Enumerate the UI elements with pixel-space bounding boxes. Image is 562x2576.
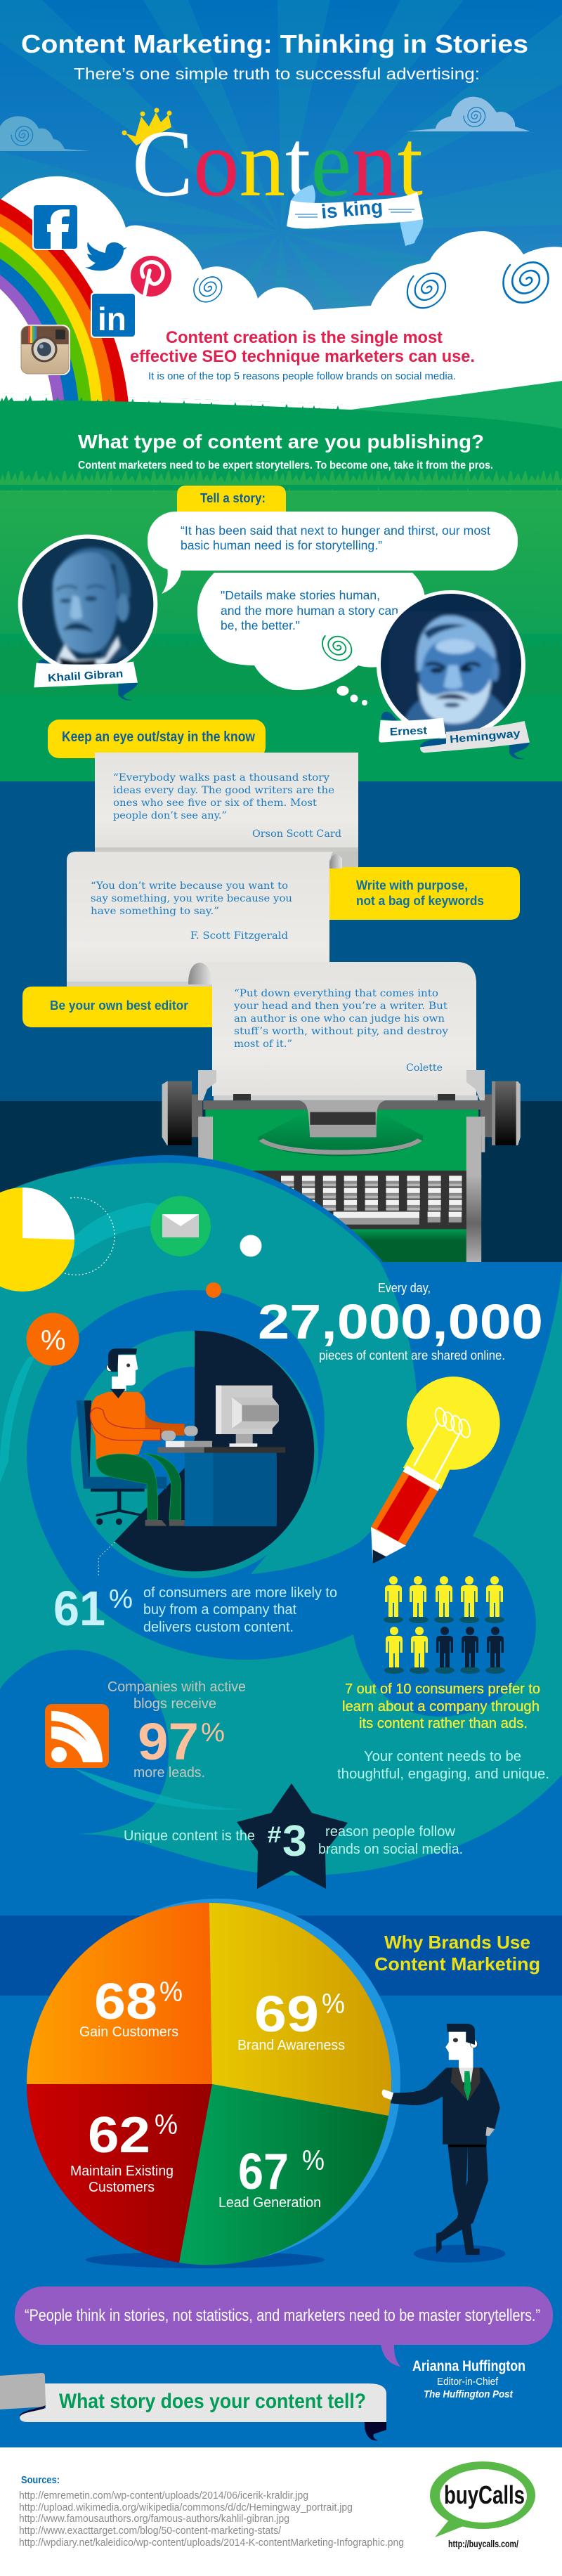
text: SEO statement: It is one of the top 5 reasons people follow brands on social media. (148, 370, 456, 382)
slice: brand awareness (209, 1903, 391, 2116)
speech bubble: Gibran quote (148, 512, 518, 594)
labels: 67 percent (218, 2144, 325, 2211)
stat: number 3 reason: 3 (282, 1817, 307, 1866)
labels: 62 percent: Customers (89, 2180, 155, 2195)
sky cloud right (405, 97, 530, 131)
trousers (96, 1454, 185, 1526)
infographic swirl background (0, 1155, 562, 2450)
sources list (19, 2474, 404, 2549)
illustration: businessman (382, 2024, 505, 2263)
tab: write with purpose: Write with purpose, (356, 878, 468, 892)
sources list: http://www.exacttarget.com/blog/50-content-marketing-stats/ (19, 2525, 282, 2537)
back arm and hand (145, 1412, 185, 1436)
ribbon: is king: is king (320, 195, 384, 223)
labels: 67 percent: 67 (238, 2144, 289, 2200)
stat: number 3 reason: # (267, 1822, 281, 1847)
slice: lead generation (179, 2084, 388, 2265)
attribution: Arianna Huffington: Editor-in-Chief (437, 2376, 499, 2388)
text: SEO statement (130, 328, 475, 382)
paper: Colette quote: “Put down everything that comes into (234, 988, 438, 999)
icon: RSS (45, 1704, 109, 1768)
typewriter paper bar and brackets (198, 1070, 485, 1100)
typewriter body (198, 1100, 485, 1263)
ribbon: Ernest Hemingway: Hemingway (450, 728, 521, 746)
attribution: Arianna Huffington: The Huffington Post (424, 2388, 514, 2400)
paper: Orson Scott Card quote: ones who see five or six of them. Most (113, 798, 318, 809)
footer background (0, 2447, 562, 2576)
stat: 97 percent: Companies with active (107, 1679, 246, 1695)
attribution: Arianna Huffington: Arianna Huffington (412, 2358, 525, 2374)
stat: 97 percent: % (201, 1718, 225, 1748)
thought bubble: Hemingway quote: be, the better." (221, 618, 300, 632)
typewriter knobs (162, 1081, 521, 1145)
band: darker blue (0, 1915, 562, 1996)
sources list: http://emremetin.com/wp-content/uploads/2014/06/icerik-kraldir.jpg (19, 2490, 308, 2502)
pie shadow (86, 2251, 325, 2268)
ribbon: what story does your content tell: What story does your content tell? (59, 2390, 366, 2413)
labels: 62 percent: % (155, 2109, 178, 2140)
labels: 62 percent: 62 (88, 2107, 150, 2164)
attribution: Arianna Huffington (412, 2358, 525, 2400)
icon: instagram (20, 325, 70, 375)
speech bubble: Gibran quote: basic human need is for storytelling.” (181, 538, 382, 552)
paper: F. Scott Fitzgerald quote: “You don’t write because you want to (91, 880, 288, 892)
subheading: Content marketers need to be expert storytellers. To become one, take it from the pros. (78, 460, 493, 471)
slice: gain customers (27, 1903, 212, 2084)
heading: why brands use content marketing (374, 1932, 540, 1975)
tab: tell a story (177, 486, 286, 512)
labels: 69 percent: % (322, 1989, 345, 2019)
paper: F. Scott Fitzgerald quote: have something to say.” (91, 906, 219, 917)
tab: tell a story: Tell a story: (200, 491, 266, 505)
icon: twitter (85, 242, 127, 271)
icon: pinterest (131, 256, 171, 297)
typewriter platen moon (258, 1100, 423, 1156)
tab: keep an eye out (48, 720, 266, 758)
typewriter (162, 1081, 521, 1263)
text: your content needs: Your content needs to be (364, 1749, 521, 1764)
paper: Orson Scott Card quote: ideas every day. The good writers are the (113, 785, 334, 796)
sources list: http://www.famousauthors.org/famous-authors/kahlil-gibran.jpg (19, 2513, 289, 2525)
rainbow (0, 199, 129, 404)
icon: linkedin: in (98, 301, 126, 337)
tab: keep an eye out: Keep an eye out/stay in the know (62, 729, 255, 745)
speech bubble: Huffington quote (15, 2286, 553, 2367)
thought bubble: Hemingway quote (197, 573, 425, 705)
paper: Orson Scott Card quote: Orson Scott Card (252, 828, 341, 840)
stat: 61 percent: 61 (53, 1581, 105, 1636)
stat: 97 percent: more leads. (133, 1765, 205, 1781)
paper: Colette quote: your head and then you’re a writer. But (233, 1001, 448, 1012)
stat: 7 out of 10 (342, 1681, 540, 1731)
portrait: Khalil Gibran (18, 535, 157, 674)
head (107, 1348, 138, 1398)
icon: light bulb pencil (371, 1377, 500, 1563)
tab: be your own best editor (22, 987, 218, 1027)
text: SEO statement: Content creation is the single most (166, 328, 443, 347)
ribbon: Ernest Hemingway: Ernest (389, 724, 427, 739)
icon: linkedin (91, 292, 136, 338)
stat: every day: 27,000,000 (258, 1294, 543, 1349)
stat: 7 out of 10: its content rather than ads. (359, 1716, 528, 1731)
stat: 61 percent: of consumers are more likely to (143, 1585, 337, 1601)
text: your content needs (337, 1749, 549, 1782)
stat: number 3 reason: brands on social media. (318, 1842, 463, 1857)
stat: 7 out of 10: learn about a company through (342, 1699, 540, 1715)
icon: crown (122, 108, 171, 145)
icon grid: 7 of 10 people (384, 1576, 505, 1674)
stat: every day: pieces of content are shared online. (319, 1348, 505, 1362)
desk (157, 1441, 285, 1526)
heading: what type of content: What type of content are you publishing? (78, 431, 484, 453)
computer monitor (216, 1386, 279, 1447)
sky cloud left (0, 116, 90, 151)
icon: pie chart decoration (0, 1188, 115, 1292)
text: your content needs: thoughtful, engaging, and unique. (337, 1767, 549, 1782)
labels: 68 percent (79, 1974, 183, 2040)
paper: Colette quote: an author is one who can judge his own (234, 1013, 445, 1024)
labels: 62 percent (70, 2107, 178, 2195)
stat: 61 percent: % (109, 1585, 133, 1614)
navy band background (0, 781, 562, 1102)
logo: buyCalls: http://buycalls.com/ (448, 2539, 518, 2549)
ribbon: Khalil Gibran (34, 659, 138, 701)
logo word: Content: Content (132, 111, 423, 216)
logo: buyCalls (430, 2461, 535, 2549)
labels: 67 percent: Lead Generation (218, 2195, 321, 2211)
paper: Orson Scott Card quote: “Everybody walks past a thousand story (113, 772, 329, 783)
stat: 61 percent: delivers custom content. (143, 1620, 294, 1635)
paper: F. Scott Fitzgerald quote: F. Scott Fitzgerald (190, 930, 288, 942)
sources list: Sources: (21, 2474, 60, 2486)
navy disc (115, 1331, 314, 1571)
thought bubble: Hemingway quote: "Details make stories human, (221, 588, 380, 602)
paper: Orson Scott Card quote: people don’t see any.” (113, 810, 227, 821)
torso (91, 1392, 145, 1459)
icon: percent: % (41, 1325, 66, 1356)
thought bubble: Hemingway quote: and the more human a story can (221, 604, 398, 618)
cloud swirls (188, 249, 556, 316)
paper: Orson Scott Card quote (95, 753, 358, 869)
sky background with sun rays (0, 0, 562, 415)
heading: why brands use content marketing: Why Brands Use (384, 1932, 530, 1953)
labels: 62 percent: Maintain Existing (70, 2164, 174, 2179)
labels: 68 percent: Gain Customers (79, 2024, 178, 2040)
stat: number 3 reason (124, 1783, 463, 1889)
paper: F. Scott Fitzgerald quote: say something, you write because you (91, 893, 292, 904)
stat: 97 percent: blogs receive (133, 1696, 216, 1712)
stat: 61 percent: buy from a company that (143, 1602, 296, 1618)
portrait: Ernest Hemingway (377, 590, 525, 739)
green section background (0, 381, 562, 784)
icon: white dot (240, 1235, 261, 1256)
stat: number 3 reason: reason people follow (325, 1824, 456, 1840)
paper: Colette quote (188, 962, 476, 1096)
sources list: http://upload.wikimedia.org/wikipedia/commons/d/dc/Hemingway_portrait.jpg (19, 2502, 353, 2513)
logo: buyCalls: buyCalls (444, 2480, 525, 2509)
paper: Colette quote: Colette (406, 1062, 443, 1074)
paper: Colette quote: most of it.” (234, 1039, 292, 1050)
paper: Colette quote: stuff’s worth, without pity, and destroy (234, 1026, 448, 1037)
icon: orange dot (206, 1282, 221, 1298)
icon: facebook (32, 204, 79, 250)
speech bubble: Gibran quote: “It has been said that next to hunger and thirst, our most (181, 523, 490, 538)
slice: maintain existing customers (27, 2084, 212, 2263)
chair (77, 1400, 166, 1525)
stat: 97 percent: 97 (138, 1712, 199, 1771)
illustration: man at computer (77, 1331, 314, 1576)
tab: be your own best editor: Be your own best editor (50, 998, 188, 1013)
front arm and hand (91, 1408, 161, 1440)
icon: email (150, 1196, 211, 1256)
paper: F. Scott Fitzgerald quote (67, 852, 342, 987)
tab: write with purpose: not a bag of keywords (356, 894, 484, 908)
stat: 7 out of 10: 7 out of 10 consumers prefer to (345, 1681, 540, 1697)
pie chart: why brands use content marketing (27, 1899, 400, 2265)
stat: every day: Every day, (378, 1281, 431, 1295)
labels: 69 percent (237, 1986, 345, 2053)
labels: 68 percent: 68 (94, 1974, 157, 2030)
white cloud bank (0, 176, 562, 506)
icon: percent (27, 1313, 79, 1366)
sources list: http://wpdiary.net/kaleidico/wp-content/uploads/2014-K-contentMarketing-Infographic.png (19, 2537, 404, 2549)
labels: 67 percent: % (302, 2145, 325, 2176)
labels: 69 percent: 69 (254, 1986, 319, 2043)
heading: why brands use content marketing: Content Marketing (374, 1953, 540, 1975)
subtitle: There’s one simple truth to successful advertising: (74, 65, 480, 83)
tab: write with purpose (327, 867, 520, 920)
labels: 68 percent: % (159, 1977, 183, 2008)
dark band background (0, 1101, 562, 1262)
title: Content Marketing: Thinking in Stories (21, 30, 528, 58)
stat: every day (258, 1281, 543, 1362)
stat: 97 percent (107, 1679, 246, 1781)
stat: number 3 reason: Unique content is the (124, 1828, 255, 1844)
ribbon: what story does your content tell (0, 2373, 386, 2440)
ribbon: is king (287, 185, 423, 246)
stat: 61 percent (53, 1581, 337, 1636)
ribbon: Ernest Hemingway (379, 712, 530, 759)
labels: 69 percent: Brand Awareness (237, 2038, 345, 2053)
typewriter keyboard (251, 1171, 466, 1229)
ribbon: Khalil Gibran: Khalil Gibran (48, 668, 124, 684)
text: SEO statement: effective SEO technique marketers can use. (130, 347, 475, 366)
